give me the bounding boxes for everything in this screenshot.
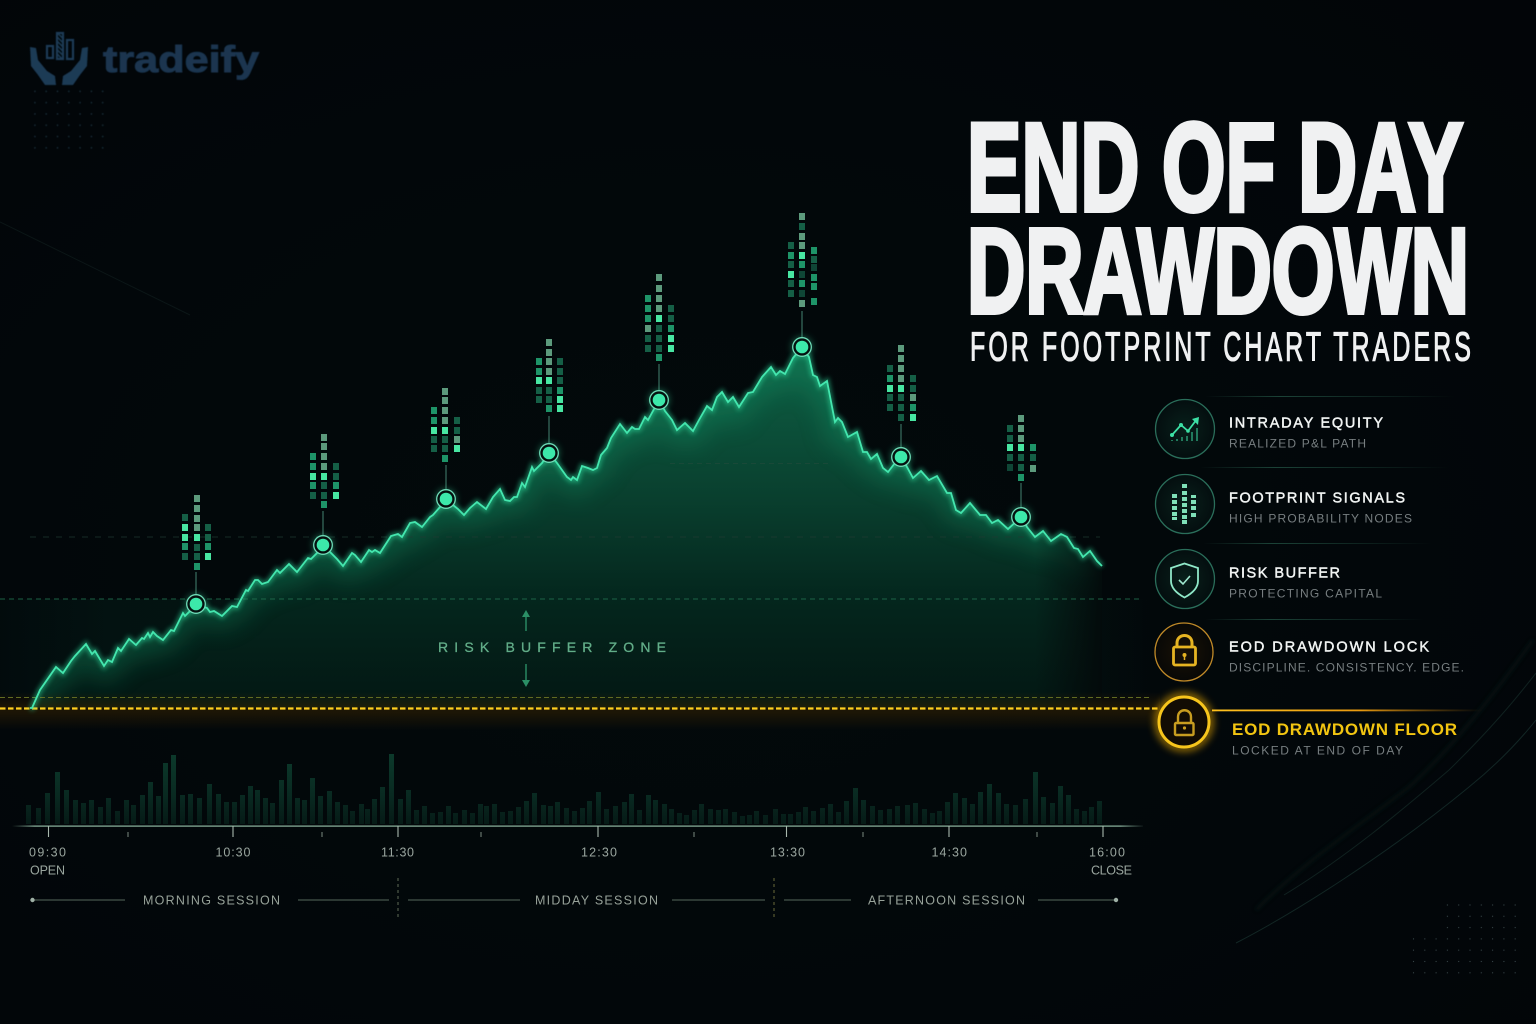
legend: risk buffer	[1156, 550, 1382, 608]
time label 09:30 open: 09:30	[29, 846, 66, 860]
time labels: 14:30	[932, 846, 967, 860]
time labels: 11:30	[381, 846, 414, 860]
icon: logo hands	[30, 47, 88, 85]
legend: EOD drawdown lock: DISCIPLINE. CONSISTENCY. EDGE.	[1229, 660, 1464, 674]
decorative background curves and dots	[0, 222, 1536, 976]
footprint signal 1	[182, 495, 211, 613]
time labels	[216, 846, 967, 860]
legend: risk buffer: RISK BUFFER	[1229, 566, 1340, 582]
reference dashed lines	[0, 464, 1150, 698]
legend: EOD drawdown floor	[1158, 696, 1482, 758]
separators	[1200, 396, 1455, 620]
time label 16:00 close: 16:00	[1089, 846, 1125, 860]
risk buffer band	[0, 599, 1150, 697]
legend: footprint signals	[1156, 474, 1412, 534]
time labels: 10:30	[216, 846, 251, 860]
legend: intraday equity: REALIZED P&L PATH	[1229, 436, 1366, 450]
time label 09:30 open: OPEN	[30, 864, 65, 878]
legend: risk buffer: PROTECTING CAPITAL	[1229, 586, 1382, 600]
legend: footprint signals: FOOTPRINT SIGNALS	[1229, 490, 1405, 506]
legend: footprint signals: HIGH PROBABILITY NODES	[1229, 512, 1412, 526]
logo wordmark: tradeify	[103, 39, 259, 80]
legend: EOD drawdown floor: LOCKED AT END OF DAY	[1232, 744, 1403, 758]
legend: intraday equity	[1156, 400, 1383, 458]
icon: floor lock	[1158, 696, 1210, 748]
logo: tradeify	[30, 33, 259, 154]
floor line	[1212, 710, 1482, 711]
footprint signal 2	[310, 434, 339, 554]
risk buffer zone label	[438, 610, 666, 687]
footprint signal 5	[645, 274, 674, 409]
footprint signal 8	[1007, 415, 1036, 526]
icon: shield	[1156, 550, 1214, 608]
time labels: 13:30	[770, 846, 805, 860]
icon: footprint	[1156, 474, 1214, 534]
icon: logo bars	[47, 33, 73, 59]
footprint signal 7	[887, 345, 916, 466]
legend: EOD drawdown lock	[1155, 623, 1464, 681]
volume bars	[26, 754, 1102, 824]
session label afternoon: AFTERNOON SESSION	[868, 894, 1025, 908]
title	[967, 98, 1474, 370]
equity area fill	[0, 340, 1110, 710]
legend: intraday equity: INTRADAY EQUITY	[1229, 416, 1383, 432]
session label midday: MIDDAY SESSION	[535, 894, 658, 908]
legend: EOD drawdown floor: EOD DRAWDOWN FLOOR	[1232, 720, 1457, 739]
panel: equity chart	[0, 213, 1160, 730]
footprint signal 6	[788, 213, 817, 356]
time label 16:00 close	[1089, 846, 1132, 878]
session label morning: MORNING SESSION	[143, 894, 280, 908]
icon: lock	[1155, 623, 1213, 681]
time label 09:30 open	[29, 846, 66, 878]
legend: EOD drawdown lock: EOD DRAWDOWN LOCK	[1229, 640, 1429, 656]
risk buffer zone label: RISK BUFFER ZONE	[438, 639, 666, 655]
EOD floor glow band	[0, 692, 1160, 730]
icon: equity chart	[1156, 400, 1214, 458]
time labels: 12:30	[581, 846, 617, 860]
EOD drawdown floor dashed line	[0, 707, 1160, 710]
time axis	[12, 826, 1143, 878]
footprint signal 4	[536, 339, 563, 462]
footprint signal 3	[431, 388, 460, 508]
session timeline	[30, 878, 1118, 920]
equity curve line	[30, 347, 1102, 708]
time label 16:00 close: CLOSE	[1091, 864, 1132, 878]
